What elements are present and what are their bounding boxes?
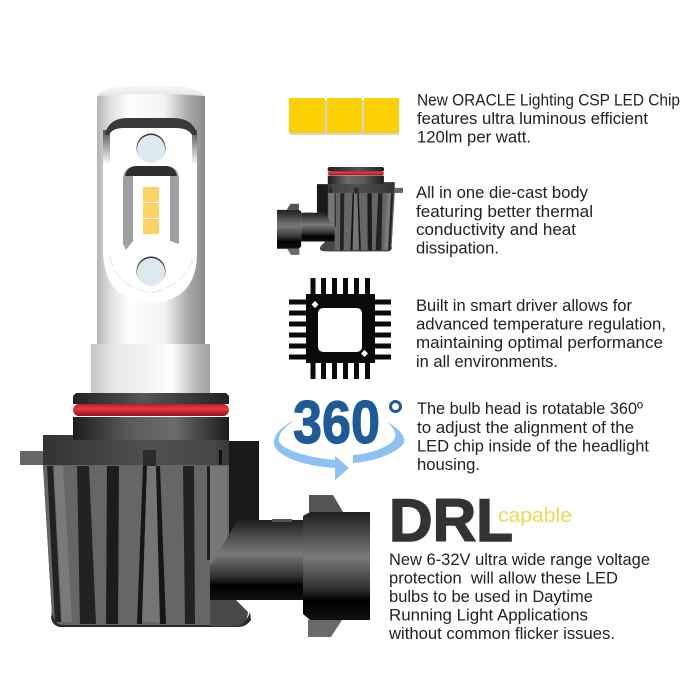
- text: die-cast body description: conductivity and heat: [416, 220, 576, 239]
- window frame: [123, 166, 179, 250]
- panel dark top edge: [105, 118, 197, 135]
- white chip panel: [103, 118, 197, 302]
- text: DRL description: without common flicker issues.: [388, 624, 615, 643]
- bulb metal shaft: [97, 86, 205, 345]
- text: rotation description: housing.: [417, 455, 480, 474]
- lower LED lens: [136, 256, 166, 286]
- bulb: LED head assembly: [91, 86, 210, 394]
- DRL heading: [389, 487, 572, 554]
- text: smart driver description: advanced temperature regulation,: [416, 314, 666, 334]
- icon: three yellow LED chips: [289, 98, 399, 135]
- text: smart driver description: Built in smart driver allows for: [416, 296, 632, 315]
- text: smart driver description: maintaining optimal performance: [416, 333, 663, 352]
- text: smart driver description: [416, 296, 666, 371]
- panel left shading: [103, 130, 110, 165]
- rotation arc: [274, 420, 404, 480]
- text: DRL description: [388, 550, 650, 643]
- bulb dome top: [97, 86, 205, 96]
- panel faint dashed arc: [110, 255, 193, 293]
- text: DRL description: New 6-32V ultra wide range voltage: [389, 550, 650, 569]
- degree mark: [390, 402, 400, 412]
- metal collar: [91, 344, 210, 394]
- text: rotation description: The bulb head is rotatable 360º: [417, 399, 643, 418]
- text: DRL description: Running Light Applications: [389, 606, 588, 624]
- icon: smart driver chip: [289, 278, 391, 379]
- window dark top: [125, 166, 177, 176]
- text: smart driver description: in all environments.: [416, 352, 558, 371]
- text: rotation description: [417, 399, 649, 474]
- text: die-cast body description: dissipation.: [416, 238, 499, 258]
- text: rotation description: to adjust the alignment of the: [417, 418, 634, 437]
- 360 numerals: 360: [293, 389, 380, 456]
- panel right shading: [192, 130, 197, 165]
- text: die-cast body description: [416, 183, 593, 258]
- heading text: LED chip description: New ORACLE Lighting CSP LED Chip: [417, 90, 680, 110]
- text: die-cast body description: featuring better thermal: [416, 202, 593, 221]
- icon: 360 degree rotation: [274, 389, 404, 480]
- text: die-cast body description: All in one die-cast body: [416, 183, 588, 202]
- text: rotation description: LED chip inside of the headlight: [417, 436, 649, 456]
- yellow LED chips: [143, 187, 159, 234]
- capable label: capable: [498, 505, 572, 527]
- DRL heading: DRL: [389, 487, 513, 554]
- icon: small die-cast body: [277, 167, 403, 255]
- heading text: LED chip description: 120lm per watt.: [417, 128, 531, 146]
- main bulb black base with connector: [20, 393, 370, 637]
- heading text: LED chip description: features ultra luminous efficient: [417, 109, 648, 128]
- inner LED window: [123, 166, 179, 250]
- upper LED lens: [136, 134, 166, 163]
- heading text: LED chip description: [417, 90, 680, 146]
- text: DRL description: bulbs to be used in Daytime: [389, 587, 593, 606]
- text: DRL description: protection will allow these LED: [389, 568, 618, 588]
